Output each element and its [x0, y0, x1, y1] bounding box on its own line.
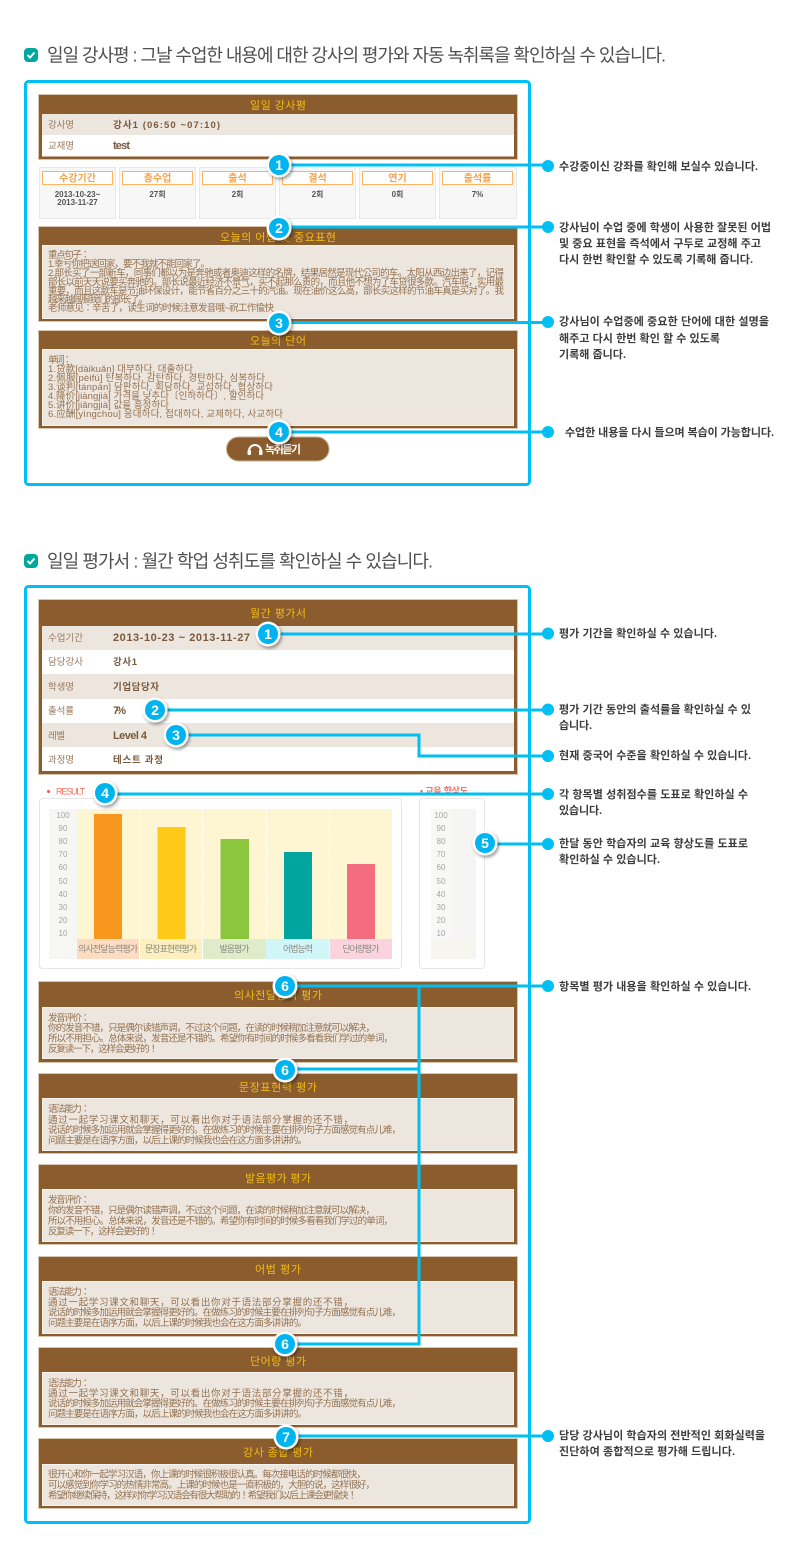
section: today's grammar and key expressions: 越来越佩服我们的部长了。 — [48, 294, 148, 306]
evaluation: pronunciation: 发音评价： — [48, 1194, 90, 1206]
badge 5, assessment: 5 — [481, 835, 489, 851]
note: level: 현재 중국어 수준을 확인하실 수 있습니다. — [559, 748, 751, 762]
section: today's grammar and key expressions: 部长以前天天说要买奔驰的。部长说最近经济不景气，买不起那么贵的，而且他不想为了车贷很多款。汽车呢，实用最 — [48, 276, 504, 288]
table: monthly assessment: 수업기간 — [48, 632, 83, 644]
note: improvement: 한달 동안 학습자의 교육 향상도를 도표로 — [559, 836, 748, 850]
stat boxes: 연기 — [388, 172, 407, 184]
badge 4, assessment: 4 — [101, 785, 109, 801]
badge 3 — [266, 310, 292, 336]
section: today's words: 2.佩服[pèifú] 탄복하다, 감탄하다, 경탄하다, 심복하다 — [48, 372, 265, 384]
evaluation: instructor overall: 可以感觉到你学习的热情非常高。上课的时候也是一直积极的，大胆的说，这样很好， — [48, 1479, 375, 1491]
evaluation: communication: 所以不用担心。总体来说，发音还是不错的。希望你有时间的时候多看看我们学过的单词， — [48, 1032, 393, 1044]
note: vocabulary — [559, 314, 769, 361]
heading: daily assessment: 일일 평가서 : 월간 학업 성취도를 확인하실 수 있습니다. — [47, 552, 433, 572]
badge 1, assessment: 1 — [264, 626, 272, 642]
section: today's grammar and key expressions: 오늘의 어법 및 중요표현 — [220, 231, 336, 244]
section: today's words: 3.谈判[tánpàn] 담판하다, 회담하다, 교섭하다, 협상하다 — [48, 381, 273, 393]
note: review by listening: 수업한 내용을 다시 들으며 복습이 가능합니다. — [565, 425, 774, 439]
table: lecture info: 강사1 (06:50 ~07:10) — [113, 119, 220, 131]
badge 6, third — [272, 1332, 298, 1356]
table: monthly assessment: Level 4 — [113, 730, 148, 742]
evaluation: vocabulary: 단어량 평가 — [250, 1355, 306, 1368]
evaluation: grammar: 说话的时候多加运用就会掌握得更好的。在做练习的时候主要在排列句子方面感觉有点儿难， — [48, 1306, 401, 1318]
evaluation: vocabulary: 通过一起学习课文和聊天，可以看出你对于语法部分掌握的还不错， — [48, 1388, 353, 1400]
bar chart: results by item: 60 — [59, 863, 68, 872]
empty chart: improvement: 100 — [434, 811, 448, 820]
bar chart: results by item: 40 — [59, 890, 68, 899]
section: today's words: 4.降价[jiàngjià] 가격을 낮추다〔인하하다〕, 할인하다 — [48, 390, 264, 402]
note: grammar correction — [559, 220, 771, 266]
badge 1: 1 — [275, 157, 283, 173]
evaluation: grammar: 问题主要是在语序方面，以后上课的时候我也会在这方面多讲讲的。 — [48, 1317, 307, 1329]
stat boxes: 2회 — [232, 189, 243, 199]
table: monthly assessment: 과정명 — [48, 755, 74, 766]
table: lecture info — [38, 94, 518, 160]
evaluation: pronunciation: 발음평가 평가 — [245, 1172, 311, 1185]
stat boxes: 7% — [472, 190, 483, 199]
section: today's grammar and key expressions: 老师意见：辛苦了，读生词的时候注意发音哦~祝工作愉快 — [48, 302, 274, 314]
callouts: section one connectors — [279, 160, 554, 438]
evaluation: vocabulary: 问题主要是在语序方面，以后上课的时候我也会在这方面多讲讲的。 — [48, 1408, 307, 1420]
callouts: section two connectors — [105, 628, 554, 1442]
evaluation: communication: 发音评价： — [48, 1012, 90, 1024]
stat boxes: 총수업 — [144, 172, 171, 184]
badge 3, assessment — [164, 722, 188, 748]
bar chart: results by item: 문장표현력평가 — [145, 943, 197, 954]
table: monthly assessment: 레벨 — [48, 731, 65, 742]
section: today's grammar and key expressions — [38, 226, 518, 322]
evaluation: sentence expression: 说话的时候多加运用就会掌握得更好的。在做练习的时候主要在排列句子方面感觉有点儿难， — [48, 1124, 401, 1136]
badge 4 — [266, 420, 292, 444]
note: vocabulary: 강사님이 수업중에 중요한 단어에 대한 설명을 — [559, 314, 769, 328]
table: monthly assessment: 2013-10-23 ~ 2013-11-27 — [113, 632, 250, 644]
table: monthly assessment: 담당강사 — [48, 656, 83, 668]
evaluation: instructor overall — [38, 1438, 518, 1508]
section: today's words: 1.贷款[dàikuǎn] 대부하다, 대출하다 — [48, 363, 193, 375]
evaluation: instructor overall: 很开心和你一起学习汉语，你上课的时候很积极很认真。每次接电话的时候都很快， — [48, 1468, 366, 1480]
evaluation: pronunciation: 反复读一下，这样会更好的！ — [48, 1226, 158, 1238]
badge 6, third: 6 — [281, 1336, 289, 1352]
note: vocabulary: 기록해 줍니다. — [559, 347, 626, 361]
evaluation: vocabulary — [38, 1348, 518, 1428]
panel: daily instructor review — [26, 82, 530, 484]
button: listen to recording — [226, 437, 329, 461]
bar chart: results by item: 단어량평가 — [342, 943, 380, 954]
table: monthly assessment: 학생명 — [48, 682, 74, 693]
empty chart: improvement: 70 — [437, 850, 446, 859]
button: listen to recording: 녹취듣기 — [265, 442, 301, 456]
bar chart: results by item: 20 — [59, 916, 68, 925]
bar chart: results by item — [40, 798, 402, 968]
chart label: result: RESULT — [56, 786, 86, 796]
note: improvement — [559, 836, 748, 866]
badge 3: 3 — [275, 315, 283, 331]
section: today's grammar and key expressions: 重点句子： — [48, 249, 90, 261]
evaluation: vocabulary: 说话的时候多加运用就会掌握得更好的。在做练习的时候主要在排列句子方面感觉有点儿难， — [48, 1398, 401, 1410]
evaluation: communication: 你的发音不错，只是偶尔读错声调，不过这个问题，在读的时候稍加注意就可以解决， — [48, 1022, 375, 1034]
table: monthly assessment: 테스트 과정 — [113, 754, 163, 766]
bar chart: results by item: 어법능력 — [283, 943, 313, 954]
table: lecture info: test — [113, 140, 130, 152]
evaluation: grammar: 语法能力： — [48, 1286, 90, 1298]
note: vocabulary: 해주고 다시 한번 확인 할 수 있도록 — [559, 331, 720, 345]
stat boxes: 출석률 — [464, 172, 491, 184]
badge 6, second: 6 — [281, 1062, 289, 1078]
evaluation: sentence expression: 语法能力： — [48, 1103, 90, 1115]
section: today's words — [38, 330, 518, 428]
table: monthly assessment: 7% — [113, 705, 126, 717]
badge 4: 4 — [275, 424, 283, 440]
table: monthly assessment: 출석률 — [48, 706, 74, 717]
stat boxes: 0회 — [392, 189, 403, 199]
note: grammar correction: 강사님이 수업 중에 학생이 사용한 잘못된 어법 — [559, 220, 771, 234]
note: current course: 수강중이신 강좌를 확인해 보실수 있습니다. — [559, 159, 758, 173]
bar chart: results by item: 30 — [59, 903, 68, 912]
badge 2, assessment: 2 — [151, 702, 159, 718]
bar chart: results by item: 80 — [59, 837, 68, 846]
badge 5, assessment — [472, 830, 498, 856]
empty chart: improvement: 80 — [437, 837, 446, 846]
bar chart: results by item: 70 — [59, 850, 68, 859]
badge 7 — [274, 1424, 298, 1450]
empty chart: improvement: 30 — [437, 903, 446, 912]
section: today's words: 6.应酬[yìngchou] 응대하다, 접대하다, 교제하다, 사교하다 — [48, 408, 283, 420]
empty chart: improvement: 40 — [437, 890, 446, 899]
table: lecture info: 강사명 — [48, 120, 74, 131]
stat boxes: 2013-10-23~ — [55, 190, 101, 199]
evaluation: pronunciation — [38, 1164, 518, 1244]
table: lecture info: 교재명 — [48, 141, 74, 152]
bar chart: results by item: 50 — [59, 877, 68, 886]
evaluation: instructor overall: 강사 종합 평가 — [243, 1446, 313, 1459]
evaluation: communication: 의사전달능력 평가 — [234, 989, 322, 1002]
stat boxes: 출석 — [228, 172, 247, 184]
note: item evaluation: 항목별 평가 내용을 확인하실 수 있습니다. — [559, 979, 751, 993]
empty chart: improvement: 60 — [437, 863, 446, 872]
evaluation: pronunciation: 所以不用担心。总体来说，发音还是不错的。希望你有时间的时候多看看我们学过的单词， — [48, 1215, 393, 1227]
evaluation: sentence expression: 问题主要是在语序方面，以后上课的时候我也会在这方面多讲讲的。 — [48, 1134, 307, 1146]
table: monthly assessment: 월간 평가서 — [250, 607, 306, 620]
section: today's words: 5.讲价[jiǎngjià] 값을 흥정하다 — [48, 399, 169, 411]
chart label: improvement: • 교육 향상도 — [420, 785, 468, 796]
evaluation: sentence expression — [38, 1074, 518, 1154]
note: grammar correction: 다시 한번 확인할 수 있도록 기록해 줍니다. — [559, 252, 753, 266]
bar chart: results by item: 의사전달능력평가 — [78, 943, 138, 954]
empty chart: improvement: 90 — [437, 824, 446, 833]
section: today's grammar and key expressions: 1.幸亏你把送回家，要不我就不能回家了。 — [48, 258, 210, 270]
note: overall evaluation: 진단하여 종합적으로 평가해 드립니다. — [559, 1444, 735, 1458]
badge 2: 2 — [275, 220, 283, 236]
note: attendance: 평가 기간 동안의 출석률을 확인하실 수 있 — [559, 702, 751, 716]
evaluation: sentence expression: 문장표현력 평가 — [239, 1081, 317, 1094]
table: lecture info: 일일 강사평 — [250, 98, 306, 112]
stat boxes: 2회 — [312, 189, 323, 199]
badge 2, assessment — [142, 698, 168, 722]
stat boxes: 수강기간 — [59, 172, 96, 184]
stat boxes: 27회 — [149, 189, 166, 199]
note: period: 평가 기간을 확인하실 수 있습니다. — [559, 626, 717, 640]
note: attendance — [559, 702, 751, 732]
section: today's grammar and key expressions: 重要，而且这款车是节油环保设计，能节省百分之三十的汽油。现在油价这么高，部长买这样的节油车真是买对了。我 — [48, 285, 504, 297]
evaluation: grammar: 通过一起学习课文和聊天，可以看出你对于语法部分掌握的还不错， — [48, 1296, 353, 1308]
panel: daily assessment — [26, 586, 530, 1522]
badge 7: 7 — [282, 1429, 290, 1445]
badge 6, first — [272, 974, 298, 998]
note: chart scores: 있습니다. — [559, 803, 602, 817]
bar chart: results by item: 90 — [59, 824, 68, 833]
note: chart scores — [559, 787, 748, 817]
bar chart: results by item: 10 — [59, 929, 68, 938]
empty chart: improvement: 50 — [437, 877, 446, 886]
note: chart scores: 각 항목별 성취점수를 도표로 확인하실 수 — [559, 787, 748, 801]
evaluation: sentence expression: 通过一起学习课文和聊天，可以看出你对于语法部分掌握的还不错， — [48, 1114, 353, 1126]
evaluation: grammar: 어법 평가 — [255, 1263, 301, 1276]
note: overall evaluation: 담당 강사님이 학습자의 전반적인 회화실력을 — [559, 1428, 765, 1442]
badge 2 — [266, 216, 292, 240]
note: grammar correction: 및 중요 표현을 즉석에서 구두로 교정해 주고 — [559, 236, 761, 250]
table: monthly assessment: 기업담당자 — [113, 681, 159, 693]
stat boxes: 2013-11-27 — [57, 198, 98, 207]
empty chart: improvement: 20 — [437, 916, 446, 925]
badge 1, assessment — [256, 622, 280, 646]
evaluation: communication — [38, 982, 518, 1062]
evaluation: instructor overall: 希望你继续保持，这样对你学习汉语会有很大帮助的！希望我们以后上课会更愉快！ — [48, 1490, 357, 1502]
evaluation: vocabulary: 语法能力： — [48, 1378, 90, 1390]
empty chart: improvement: 10 — [437, 929, 446, 938]
bar chart: results by item: 발음평가 — [220, 944, 250, 954]
badge 6, second — [272, 1058, 298, 1082]
table: monthly assessment — [38, 600, 518, 774]
note: improvement: 확인하실 수 있습니다. — [559, 852, 660, 866]
note: attendance: 습니다. — [559, 718, 592, 732]
section: today's words: 单词： — [48, 354, 72, 366]
bar chart: results by item: 100 — [56, 811, 70, 820]
table: monthly assessment: 강사1 — [113, 656, 138, 668]
empty chart: improvement — [420, 798, 484, 968]
section: today's words: 오늘의 단어 — [250, 334, 306, 348]
section: today's grammar and key expressions: 2.部长买了一部新车，同事们都以为是奔驰或者奥迪这样的名牌，结果居然是现代公司的车。太阳从西边出来了，记得 — [48, 267, 504, 279]
evaluation: communication: 反复读一下，这样会更好的！ — [48, 1043, 158, 1055]
heading: daily instructor review: 일일 강사평 : 그날 수업한 내용에 대한 강사의 평가와 자동 녹취록을 확인하실 수 있습니다. — [47, 46, 666, 66]
stat boxes: 결석 — [308, 172, 327, 184]
stat boxes — [40, 168, 516, 218]
badge 1 — [266, 152, 292, 178]
badge 6, first: 6 — [281, 978, 289, 994]
badge 4, assessment — [92, 780, 118, 806]
evaluation: pronunciation: 你的发音不错，只是偶尔读错声调，不过这个问题，在读的时候稍加注意就可以解决， — [48, 1204, 375, 1216]
evaluation: grammar — [38, 1256, 518, 1336]
badge 3, assessment: 3 — [172, 727, 180, 743]
note: overall evaluation — [559, 1428, 765, 1458]
